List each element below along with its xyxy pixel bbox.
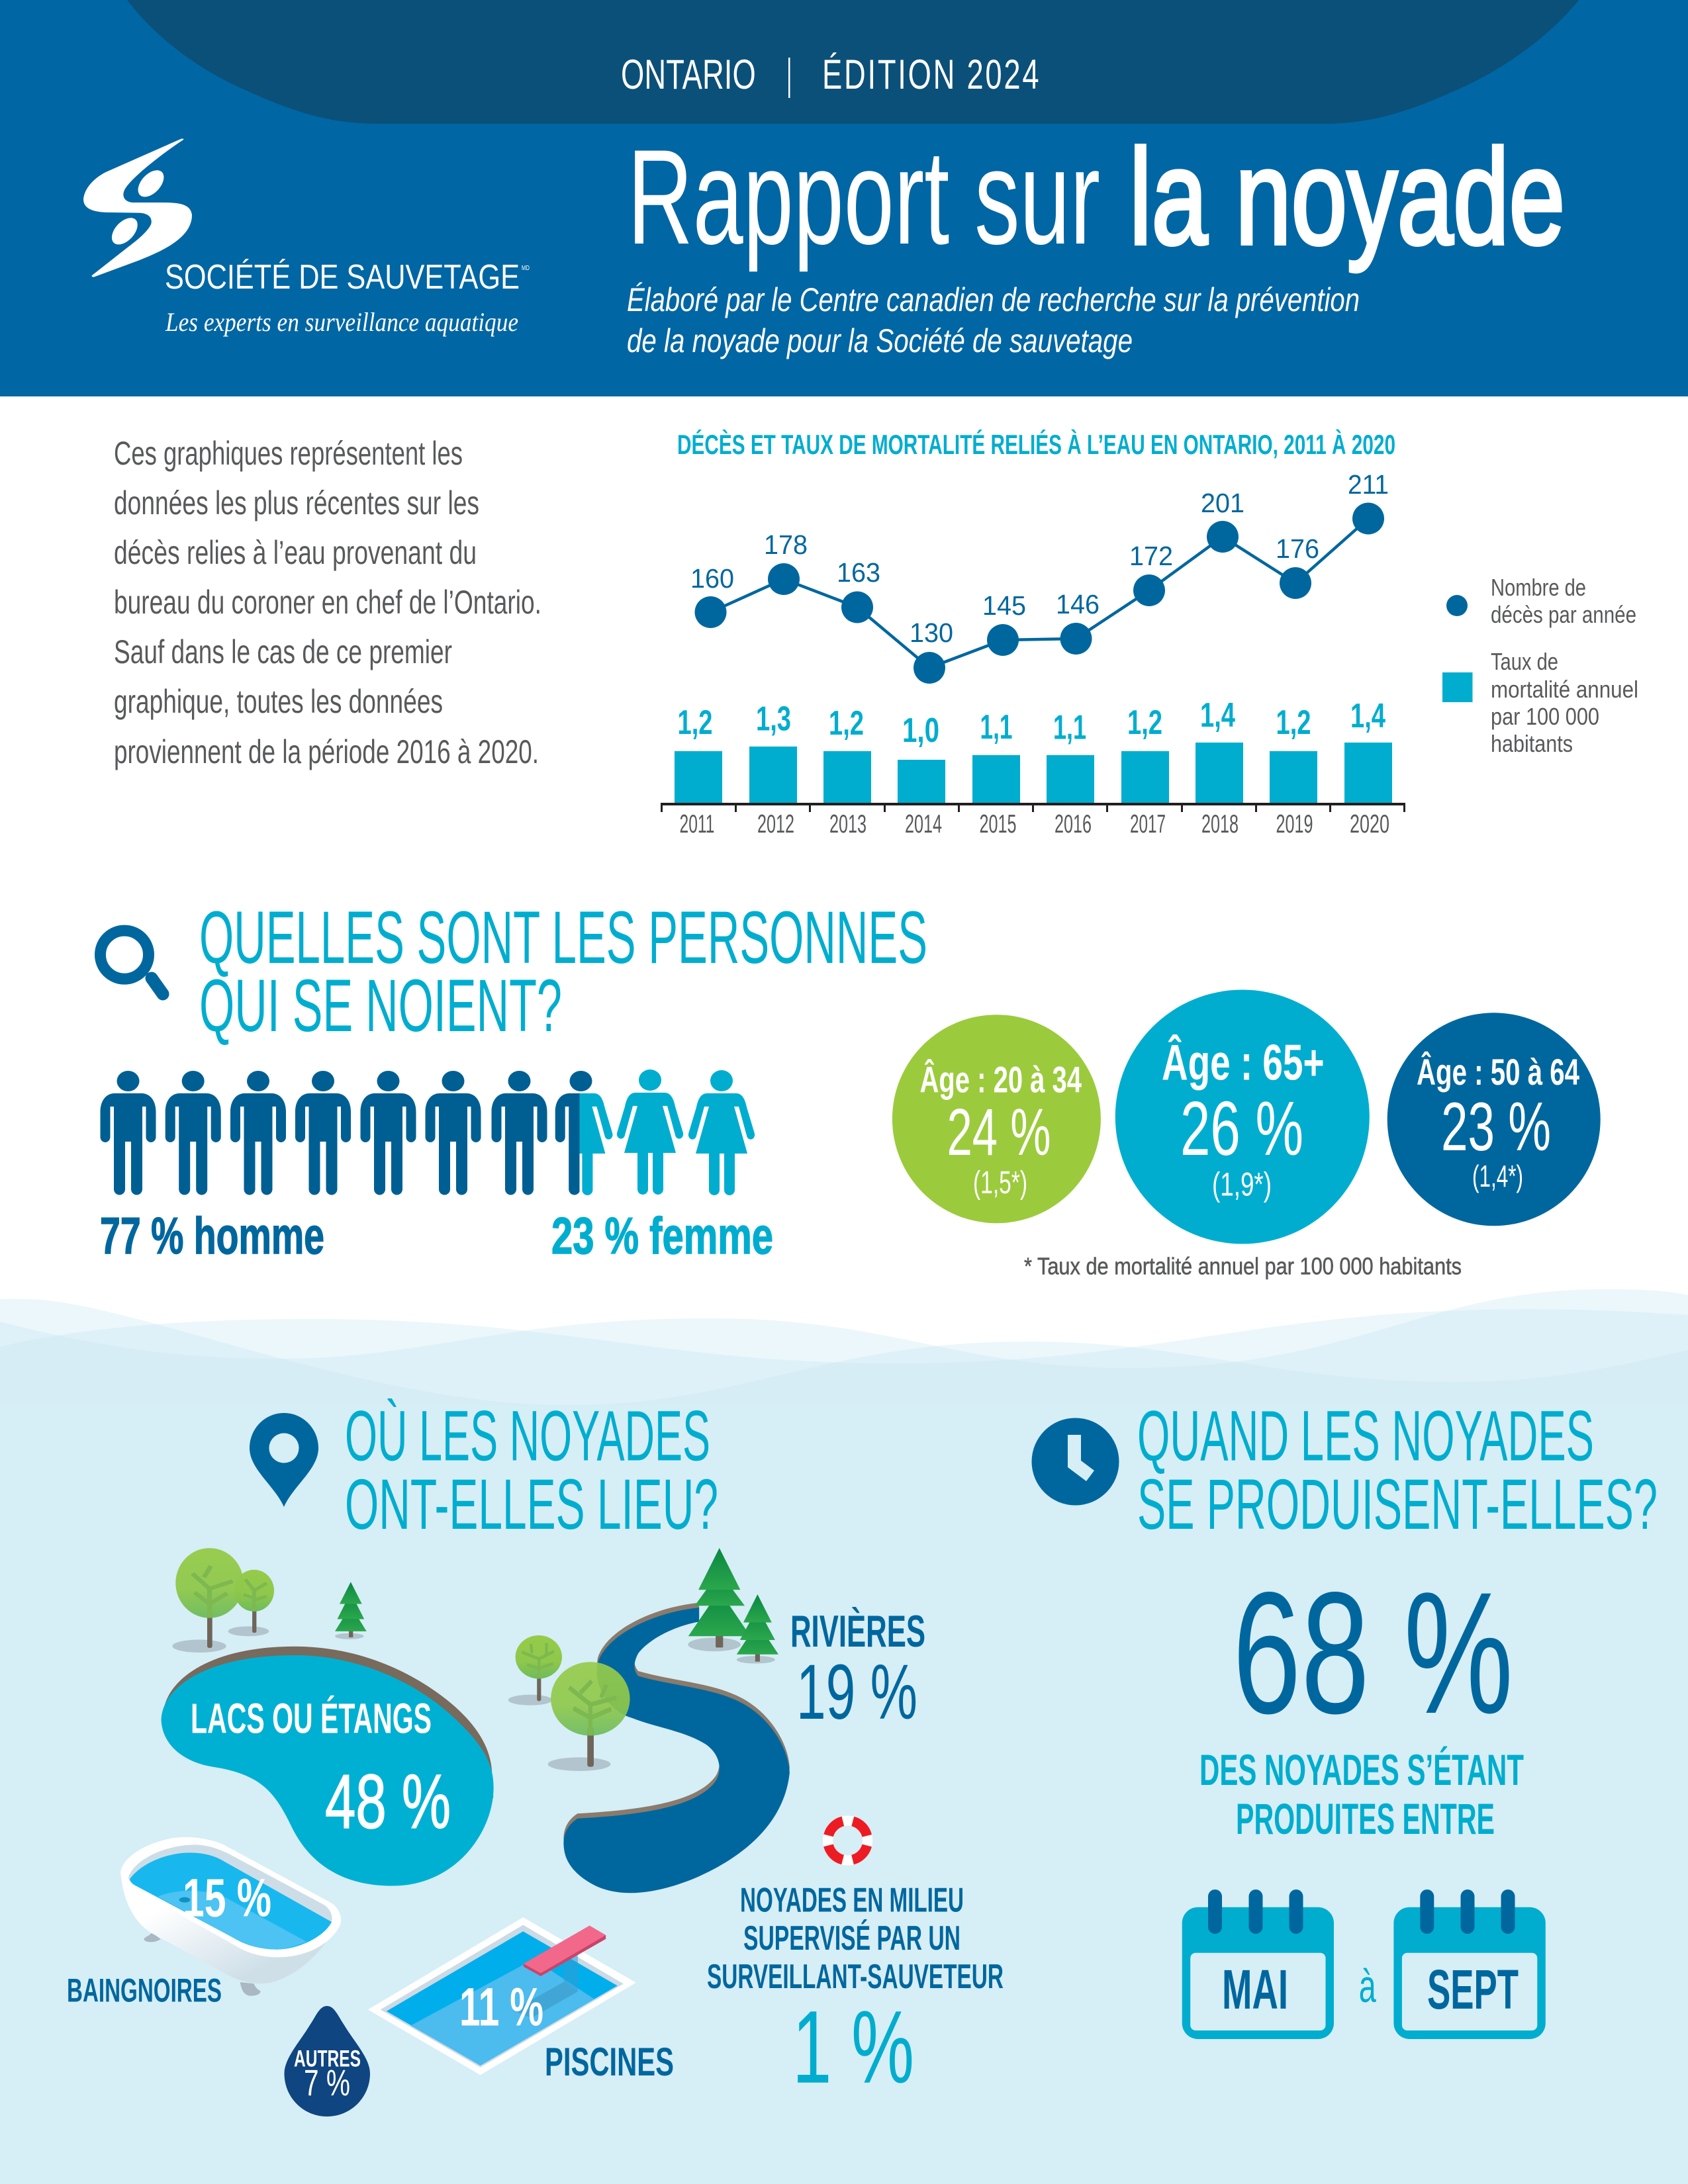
axis year labels: 2011: [679, 810, 715, 839]
heading: who drowns: QUELLES SONT LES PERSONNES: [199, 896, 927, 979]
bar value labels: 1,0: [902, 711, 939, 750]
title: Rapport sur: [628, 122, 1100, 273]
icon: calendar May: [1182, 1889, 1334, 2039]
edition label: [621, 51, 1039, 98]
label: supervised: NOYADES EN MILIEU: [740, 1881, 964, 1919]
axis year labels: [679, 810, 1389, 839]
pictogram: men: [101, 1071, 611, 1195]
label: rivers: RIVIÈRES: [790, 1606, 925, 1657]
bars: annual mortality rate: [675, 743, 1392, 803]
value: supervised: 1 %: [792, 1990, 914, 2105]
text: drownings occurring between: [1199, 1745, 1524, 1843]
icon: calendar September: [1393, 1889, 1546, 2039]
river: [563, 1603, 790, 1893]
bar value labels: 1,1: [980, 708, 1013, 747]
age circle: 20 to 34: Âge : 20 à 34: [920, 1059, 1082, 1101]
illustration: bathtub: [120, 1837, 341, 1996]
heading: who drowns: QUI SE NOIENT?: [199, 964, 562, 1047]
illustration: river and trees: [508, 1548, 790, 1893]
line value labels: 145: [982, 590, 1026, 621]
heading: who drowns: [199, 896, 927, 1047]
line value labels: 163: [837, 557, 880, 588]
connector: à: à: [1359, 1960, 1376, 2012]
text block: introduction: graphique, toutes les données: [114, 683, 443, 720]
value: lakes: 48 %: [325, 1758, 451, 1844]
illustration: trees and lake: [162, 1548, 494, 1886]
bar value labels: 1,4: [1350, 697, 1385, 735]
line value labels: [690, 469, 1389, 648]
axis year labels: 2013: [829, 810, 867, 839]
logo wordmark: SOCIÉTÉ DE SAUVETAGE: [165, 258, 520, 296]
axis year labels: 2017: [1130, 810, 1166, 839]
axis year labels: 2014: [905, 810, 942, 839]
leafy trees: [516, 1635, 630, 1767]
icon: water drop, others: [285, 2006, 370, 2116]
label: pools: PISCINES: [545, 2040, 674, 2084]
label: supervised: [707, 1881, 1004, 1996]
age circle: 50 to 64: 23 %: [1441, 1089, 1551, 1165]
icon: location pin: [250, 1413, 318, 1507]
bar value labels: 1,1: [1053, 708, 1086, 747]
header dark tab: [127, 0, 1579, 124]
subtitle: Élaboré par le Centre canadien de recherche sur la prévention: [627, 281, 1360, 318]
age circle: 65 plus: 26 %: [1180, 1085, 1303, 1171]
subtitle: de la noyade pour la Société de sauvetage: [627, 322, 1133, 359]
line value labels: 201: [1201, 488, 1244, 518]
value: bathtubs: 15 %: [183, 1868, 271, 1929]
legend: par 100 000: [1491, 703, 1599, 730]
text block: introduction: bureau du coroner en chef de l’Ontario.: [114, 584, 541, 621]
icon: clock: [1031, 1418, 1119, 1505]
tub body: [121, 1875, 340, 1983]
pines: [688, 1548, 778, 1662]
label: lakes: LACS OU ÉTANGS: [191, 1695, 432, 1743]
age circle: 50 to 64: Âge : 50 à 64: [1417, 1051, 1579, 1093]
legend: mortalité annuel: [1491, 676, 1638, 703]
icon: lifesaving society logo mark: [83, 138, 192, 277]
axis year labels: 2020: [1350, 810, 1389, 839]
icon: calendar September: SEPT: [1427, 1958, 1519, 2021]
axis year labels: 2012: [757, 810, 794, 839]
age circle: 65 plus: Âge : 65+: [1162, 1034, 1324, 1091]
bar value labels: 1,4: [1200, 696, 1235, 735]
line value labels: 176: [1276, 533, 1319, 564]
logo tagline: Les experts en surveillance aquatique: [165, 307, 518, 337]
axis year labels: 2015: [980, 810, 1017, 839]
line: deaths per year: [695, 503, 1384, 684]
label: bathtubs: BAINGNOIRES: [67, 1972, 222, 2009]
pictogram: women: [580, 1069, 755, 1195]
line value labels: 130: [910, 617, 953, 648]
icon: water drop, others: 7 %: [304, 2062, 350, 2103]
label: supervised: SURVEILLANT-SAUVETEUR: [707, 1958, 1004, 1996]
text block: introduction: données les plus récentes sur les: [114, 484, 479, 522]
label: women share: 23 % femme: [551, 1206, 773, 1265]
label: supervised: SUPERVISÉ PAR UN: [743, 1919, 961, 1958]
text block: introduction: décès relies à l’eau provenant du: [114, 534, 477, 571]
edition label: ÉDITION 2024: [822, 51, 1039, 98]
legend: Nombre de: [1491, 574, 1586, 601]
legend: Taux de: [1491, 648, 1558, 675]
age circle: 20 to 34: (1,5*): [973, 1165, 1027, 1201]
heading: where: OÙ LES NOYADES: [345, 1396, 710, 1476]
trees left of lake: [175, 1548, 274, 1648]
footnote: * Taux de mortalité annuel par 100 000 habitants: [1024, 1253, 1462, 1280]
tree shadows: [508, 1637, 775, 1771]
illustration: swimming pool: [368, 1917, 636, 2075]
icon: calendar May: MAI: [1222, 1958, 1288, 2021]
text block: introduction: Sauf dans le cas de ce premier: [114, 633, 452, 670]
heading: where: ONT-ELLES LIEU?: [345, 1464, 718, 1544]
value: 68 percent: 68 %: [1233, 1556, 1513, 1750]
age circle: 20 to 34: [892, 1015, 1101, 1223]
line value labels: 160: [690, 563, 734, 594]
logo wordmark: MD: [522, 265, 530, 272]
diving board: [524, 1926, 606, 1976]
bar value labels: 1,2: [1276, 704, 1311, 742]
text: drownings occurring between: PRODUITES ENTRE: [1236, 1794, 1495, 1843]
heading: when: [1137, 1396, 1658, 1544]
axis year labels: 2016: [1055, 810, 1092, 839]
age circle: 65 plus: (1,9*): [1212, 1166, 1272, 1203]
line value labels: 211: [1348, 469, 1389, 500]
text block: introduction: Ces graphiques représentent les: [114, 435, 463, 472]
axis year labels: 2019: [1276, 810, 1313, 839]
value: rivers: 19 %: [796, 1649, 917, 1736]
tub water: [130, 1852, 332, 1950]
panel: header band: [0, 0, 1688, 396]
line value labels: 178: [764, 529, 808, 560]
icon: water drop, others: AUTRES: [294, 2046, 361, 2072]
subtitle: [627, 281, 1360, 359]
bar value labels: 1,3: [756, 700, 791, 739]
edition label: ONTARIO: [621, 51, 756, 98]
bar value labels: 1,2: [678, 704, 712, 742]
age circle: 65 plus: [1115, 990, 1370, 1244]
small pine: [335, 1582, 367, 1637]
chart heading: DÉCÈS ET TAUX DE MORTALITÉ RELIÉS À L’EAU EN ONTARIO, 2011 À 2020: [677, 429, 1395, 460]
tree shadows: [172, 1626, 364, 1653]
line value labels: 146: [1056, 589, 1100, 619]
heading: where: [345, 1396, 718, 1544]
legend: décès par année: [1491, 601, 1636, 628]
legend: [1442, 574, 1638, 757]
age circle: 50 to 64: (1,4*): [1472, 1159, 1523, 1193]
axis: [661, 803, 1405, 812]
bar value labels: 1,2: [829, 704, 864, 743]
line value labels: 172: [1129, 541, 1173, 571]
tub feet: [144, 1933, 260, 1996]
label: men share: 77 % homme: [100, 1206, 324, 1265]
water background with waves: [0, 1289, 1688, 2184]
icon: lifebuoy: [823, 1816, 872, 1865]
text block: introduction: proviennent de la période 2016 à 2020.: [114, 733, 539, 770]
axis year labels: 2018: [1201, 810, 1239, 839]
legend: habitants: [1491, 730, 1573, 757]
chart: deaths line and mortality bars: [661, 469, 1405, 839]
bar value labels: [678, 696, 1385, 750]
value: pools: 11 %: [459, 1978, 543, 2038]
text block: introduction: [114, 435, 541, 770]
bar value labels: 1,2: [1127, 704, 1162, 742]
lake: [162, 1647, 494, 1886]
icon: magnifying glass: [101, 931, 163, 994]
age circle: 20 to 34: 24 %: [947, 1095, 1051, 1169]
age circle: 50 to 64: [1387, 1013, 1601, 1226]
